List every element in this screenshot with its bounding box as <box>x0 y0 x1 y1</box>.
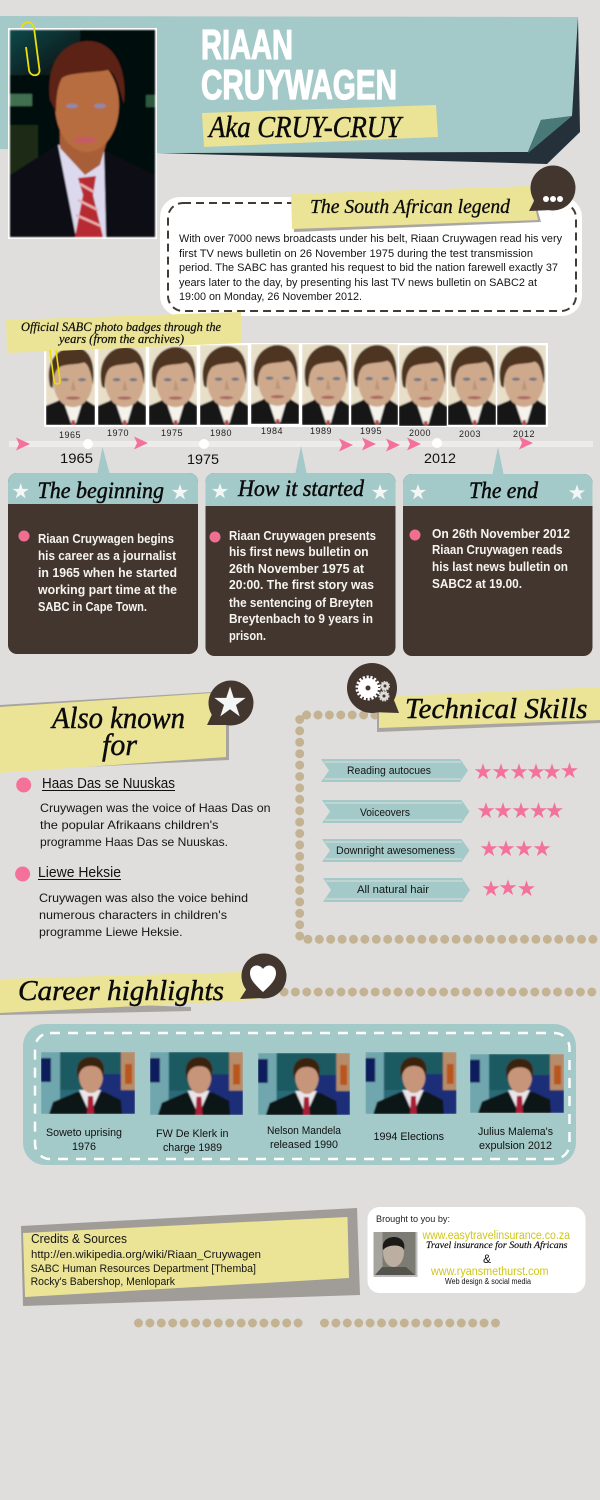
dotted footer divider <box>138 1318 496 1328</box>
skill bar: All natural hair <box>323 878 470 902</box>
item: Haas Das se Nuuskas: programme Haas Das se Nuuskas. <box>40 835 228 849</box>
subtitle ribbon: Aka CRUY-CRUY <box>207 109 403 144</box>
bullet <box>18 530 30 542</box>
text: the beginning: Riaan Cruywagen begins <box>38 532 174 546</box>
item: Liewe Heksie: Cruywagen was also the voice behind <box>39 891 248 905</box>
panel: the end <box>403 447 592 656</box>
legend heading ribbon: The South African legend <box>310 196 511 218</box>
skill bar: Downright awesomeness <box>322 839 470 862</box>
panel: brought to you by: Brought to you by: <box>376 1214 450 1225</box>
panel: brought to you by: & <box>483 1252 491 1266</box>
panel: credits and sources: http://en.wikipedia.org/wiki/Riaan_Cruywagen <box>31 1249 261 1261</box>
icon: small paperclip <box>50 350 60 384</box>
badge caption ribbon <box>6 312 242 353</box>
panel: credits and sources: Credits & Sources <box>31 1231 127 1246</box>
heading ribbon: career highlights <box>0 972 258 1015</box>
badge year labels: 1989 <box>310 426 332 436</box>
legend body text: first TV news bulletin on 26 November 1975 during the test transmission <box>179 248 533 260</box>
legend body text: period. The SABC has granted his request to bid the nation farewell exactly 37 <box>179 262 558 274</box>
panel: how it started <box>206 446 396 656</box>
icon: star speech bubble <box>207 680 254 726</box>
text: the beginning: working part time at the <box>37 583 177 597</box>
text: how it started: prison. <box>229 629 266 643</box>
photo badge strip <box>44 343 548 427</box>
text: the beginning <box>37 532 177 614</box>
timeline year labels <box>60 450 456 467</box>
rating: six stars <box>475 762 578 779</box>
captions: FW De Klerk in <box>156 1128 228 1140</box>
badge year labels: 1975 <box>161 428 183 438</box>
photo: Nelson Mandela <box>258 1053 350 1115</box>
badge caption ribbon: years (from the archives) <box>57 332 184 346</box>
text: how it started <box>229 529 376 643</box>
badge year labels: 1965 <box>59 430 81 440</box>
skill bar: Reading autocues <box>321 759 468 782</box>
heading ribbon: career highlights: Career highlights <box>18 975 224 1007</box>
text: the end: Riaan Cruywagen reads <box>432 543 563 557</box>
portrait photo <box>8 28 157 239</box>
panel: brought to you by: Web design & social media <box>445 1277 531 1286</box>
item: Haas Das se Nuuskas <box>16 775 271 849</box>
rating: five stars <box>478 802 563 818</box>
skill bar: Voiceovers: Voiceovers <box>360 807 410 819</box>
skill bar: All natural hair: All natural hair <box>357 884 429 896</box>
badge year labels: 2003 <box>459 429 481 439</box>
dotted line: career highlights <box>284 988 600 996</box>
badge year labels: 1984 <box>261 426 283 436</box>
icon: gears speech bubble <box>347 663 399 713</box>
panel: brought to you by <box>368 1207 586 1293</box>
photo: sponsor <box>374 1232 418 1277</box>
badge year labels: 1995 <box>360 426 382 436</box>
icon: speech bubble with dots <box>529 166 576 211</box>
text: the end: SABC2 at 19.00. <box>432 577 522 591</box>
text: the beginning: SABC in Cape Town. <box>38 600 147 614</box>
title: CRUYWAGEN <box>201 61 397 108</box>
item: Haas Das se Nuuskas: Cruywagen was the voice of Haas Das on <box>40 801 270 815</box>
skill bar: Voiceovers <box>322 800 470 823</box>
icon: paperclip <box>22 22 40 75</box>
badge year labels: 2012 <box>513 429 535 439</box>
dotted frame: technical skills <box>300 715 600 939</box>
panel: brought to you by: www.ryansmethurst.com <box>430 1266 548 1278</box>
timeline year labels: 1975 <box>187 451 219 467</box>
text: how it started: the sentencing of Breyten <box>229 596 373 610</box>
skill bar: Reading autocues: Reading autocues <box>347 765 431 777</box>
badge year labels: 1970 <box>107 428 129 438</box>
captions: charge 1989 <box>163 1142 222 1154</box>
legend body text: With over 7000 news broadcasts under his belt, Riaan Cruywagen read his very <box>179 233 562 245</box>
heading: how it started: How it started <box>237 476 364 501</box>
captions: Julius Malema's <box>478 1126 553 1138</box>
text: how it started: 26th November 1975 at <box>229 562 365 576</box>
captions: 1976 <box>72 1141 96 1153</box>
heading: the end: The end <box>469 478 538 503</box>
panel: the South African legend <box>160 166 582 316</box>
header banner <box>0 16 580 164</box>
stars <box>410 484 585 500</box>
item: Liewe Heksie <box>15 864 248 939</box>
item: Liewe Heksie: Liewe Heksie <box>38 864 121 881</box>
photo: FW De Klerk <box>150 1052 243 1115</box>
captions: Soweto uprising <box>46 1127 122 1139</box>
text: the end: his last news bulletin on <box>432 560 568 574</box>
legend body text: years later to the day, by presenting his last TV news bulletin on SABC2 at <box>179 277 537 289</box>
panel: career highlights <box>23 1024 576 1165</box>
legend heading ribbon <box>291 186 541 232</box>
panel: credits and sources: Rocky's Babershop, Menlopark <box>31 1276 175 1288</box>
text: the end <box>432 527 570 591</box>
captions <box>46 1125 553 1154</box>
badge year labels: 2000 <box>409 428 431 438</box>
text: the beginning: in 1965 when he started <box>38 566 177 580</box>
title: RIAAN <box>201 21 293 68</box>
text: how it started: Riaan Cruywagen presents <box>229 529 376 543</box>
captions: Nelson Mandela <box>267 1125 342 1137</box>
skill bar: Downright awesomeness: Downright awesomeness <box>336 845 455 857</box>
captions: released 1990 <box>270 1139 338 1151</box>
heading ribbon: technical skills <box>377 687 600 732</box>
captions: expulsion 2012 <box>479 1140 552 1152</box>
text: how it started: 20:00. The first story was <box>229 578 374 592</box>
bullet <box>210 532 220 542</box>
captions: 1994 Elections <box>374 1131 444 1143</box>
stars <box>13 483 188 499</box>
timeline bar <box>9 436 593 452</box>
stars <box>212 483 388 499</box>
item: Haas Das se Nuuskas: the popular Afrikaans children's <box>40 818 218 832</box>
timeline year labels: 2012 <box>424 450 456 466</box>
text: the end: On 26th November 2012 <box>432 527 570 541</box>
bullet <box>410 530 420 540</box>
rating: four stars <box>481 840 550 856</box>
heading ribbon: also known for: for <box>102 727 138 762</box>
panel: the beginning <box>8 447 198 654</box>
heading: the beginning: The beginning <box>38 478 164 503</box>
item: Haas Das se Nuuskas: Haas Das se Nuuskas <box>42 775 175 792</box>
panel: credits and sources: SABC Human Resources Department [Themba] <box>31 1263 256 1275</box>
photo: Julius Malema <box>470 1054 564 1113</box>
heading ribbon: technical skills: Technical Skills <box>405 693 588 725</box>
heading ribbon: also known for <box>0 692 229 773</box>
item: Liewe Heksie: numerous characters in children's <box>39 908 227 922</box>
legend body text <box>179 233 562 303</box>
legend body text: 19:00 on Monday, 26 November 2012. <box>179 291 362 303</box>
text: how it started: his first news bulletin on <box>229 545 368 559</box>
text: how it started: Breytenbach to 9 years in <box>229 612 373 626</box>
timeline year labels: 1965 <box>60 450 93 466</box>
panel: brought to you by: www.easytravelinsurance.co.za <box>422 1230 571 1242</box>
badge year labels: 1980 <box>210 428 232 438</box>
photo: 1994 Elections <box>366 1052 456 1114</box>
item: Liewe Heksie: programme Liewe Heksie. <box>39 925 182 939</box>
panel: credits and sources <box>21 1208 360 1306</box>
panel: brought to you by: Travel insurance for South Africans <box>426 1240 568 1251</box>
badge caption ribbon: Official SABC photo badges through the <box>21 320 221 334</box>
badge year labels <box>59 426 535 440</box>
icon: heart speech bubble <box>240 954 286 999</box>
photo: Soweto uprising <box>41 1052 135 1114</box>
heading ribbon: also known for: Also known <box>50 700 185 735</box>
title <box>201 21 397 108</box>
text: the beginning: his career as a journalist <box>38 549 177 563</box>
rating: three stars <box>483 879 535 896</box>
